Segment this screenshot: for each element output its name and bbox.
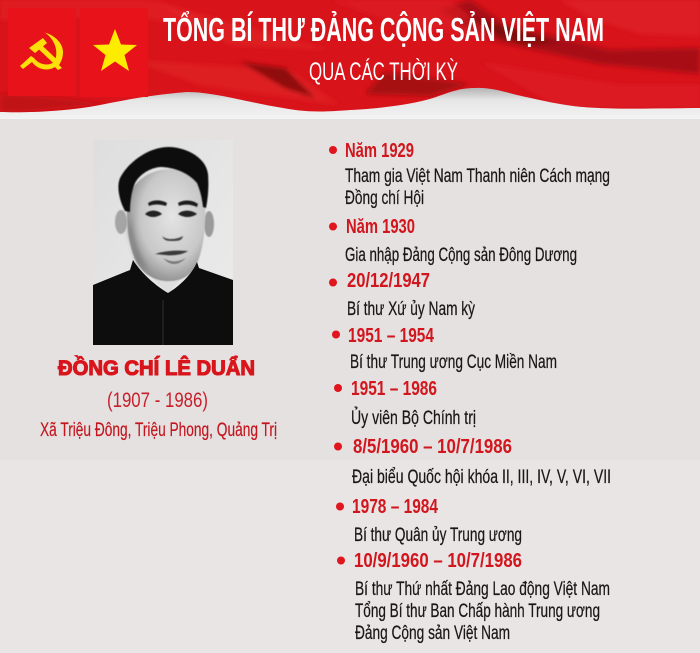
- header banner: red flag: [0, 0, 700, 120]
- subtitle: QUA CÁC THỜI KỲ: [309, 57, 458, 86]
- item: 1929: Năm 1929: [345, 140, 414, 162]
- item: 1960-1986 General Secretary: [337, 550, 610, 644]
- timeline list: [329, 140, 611, 644]
- item: 1978-1984: [336, 496, 522, 546]
- facial features: [145, 200, 198, 264]
- icon: party emblem hammer and sickle: [8, 8, 76, 96]
- item: 1930: Năm 1930: [346, 216, 415, 238]
- item: 1960-1986 National Assembly: 8/5/1960 – 10/7/1986: [353, 436, 512, 458]
- item: 1929: [329, 140, 610, 209]
- item: 1978-1984: Bí thư Quân ủy Trung ương: [354, 525, 522, 546]
- black tunic: [93, 260, 233, 345]
- item: 1960-1986 General Secretary: Bí thư Thứ nhất Đảng Lao động Việt Nam: [355, 579, 610, 600]
- item: 1951-1986: 1951 – 1986: [351, 378, 437, 400]
- item: 1951-1986: Ủy viên Bộ Chính trị: [351, 407, 476, 429]
- icon: yellow star flag: [80, 8, 148, 97]
- hair: [118, 147, 208, 212]
- portrait photo: [93, 140, 233, 345]
- item: 1951-1954: [332, 325, 557, 373]
- item: 1960-1986 National Assembly: [334, 436, 611, 488]
- item: 1951-1986: [334, 378, 476, 429]
- item: 1951-1954: Bí thư Trung ương Cục Miền Nam: [350, 352, 557, 373]
- item: 1951-1954: 1951 – 1954: [348, 325, 435, 347]
- item: 20/12/1947: 20/12/1947: [347, 270, 430, 292]
- item: 1960-1986 General Secretary: 10/9/1960 – 10/7/1986: [354, 550, 522, 572]
- item: 1960-1986 General Secretary: Đảng Cộng sản Việt Nam: [355, 623, 510, 644]
- life years: (1907 - 1986): [107, 389, 208, 412]
- item: 1930: [329, 216, 577, 266]
- collar: [158, 280, 178, 292]
- item: 1929: Tham gia Việt Nam Thanh niên Cách mạng: [345, 166, 610, 187]
- face: [127, 169, 205, 281]
- name: ĐỒNG CHÍ LÊ DUẨN: [58, 356, 255, 380]
- item: 1960-1986 National Assembly: Đại biểu Quốc hội khóa II, III, IV, V, VI, VII: [352, 467, 611, 488]
- item: 1930: Gia nhập Đảng Cộng sản Đông Dương: [345, 245, 577, 266]
- item: 1960-1986 General Secretary: Tổng Bí thư Ban Chấp hành Trung ương: [355, 601, 600, 622]
- birthplace: Xã Triệu Đông, Triệu Phong, Quảng Trị: [40, 420, 277, 441]
- item: 20/12/1947: Bí thư Xứ ủy Nam kỳ: [347, 299, 475, 320]
- item: 1929: Đồng chí Hội: [345, 188, 424, 209]
- item: 1978-1984: 1978 – 1984: [352, 496, 439, 518]
- item: 20/12/1947: [329, 270, 475, 320]
- ears: [115, 210, 214, 237]
